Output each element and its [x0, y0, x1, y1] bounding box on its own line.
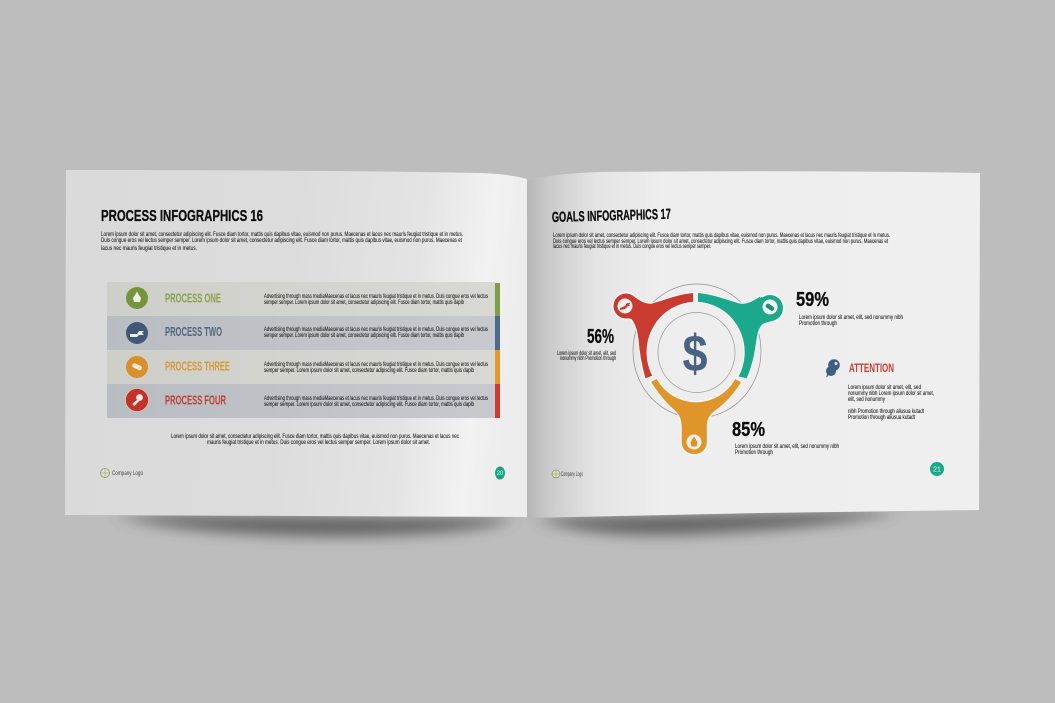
dollar sign: $ [682, 325, 708, 383]
row: process three: semper semper. Lorem ipsum dolor sit amet, consectetur adipiscing elit. Fusce diam tortor, mattis quis dapib [264, 367, 474, 374]
row: process two: semper semper. Lorem ipsum dolor sit amet, consectetur adipiscing elit. Fusce diam tortor, mattis quis dapib [264, 332, 464, 339]
row: process four: Advertising through mass mediaMaecenas et lacus nec mauris feugiat tristique et in metus. Duis congue eros vel lectus [264, 395, 488, 402]
title: GOALS INFOGRAPHICS 17 [552, 207, 671, 226]
row: process three [107, 350, 500, 384]
attention callout: ATTENTION [849, 361, 894, 375]
attention callout: Promotion through aliusua kutadt [848, 414, 915, 421]
stat 59% [796, 289, 903, 327]
intro paragraph: lacus nec mauris feugiat tristique et in metus. Duis congue eros vel lectus semper semper. [553, 243, 711, 250]
attention callout [848, 361, 934, 421]
row: process four [107, 384, 500, 418]
row: process one: semper semper. Lorem ipsum dolor sit amet, consectetur adipiscing elit. Fusce diam tortor, mattis quis dapib [264, 299, 464, 306]
row: process four: semper semper. Lorem ipsum dolor sit amet, consectetur adipiscing elit. Fusce diam tortor, mattis quis dapib [264, 401, 474, 408]
row: process one: Advertising through mass mediaMaecenas et lacus nec mauris feugiat tristique et in metus. Duis congue eros vel lectus [264, 293, 488, 300]
page number 20 [495, 466, 505, 480]
page shadows [115, 511, 900, 536]
stat 59%: 59% [796, 289, 829, 311]
stat 56%: nonummy nibh Promotion through [560, 355, 616, 362]
company logo [552, 470, 583, 478]
page number 21 [930, 462, 944, 476]
page number 20: 20 [497, 471, 504, 477]
stat 56% [557, 326, 616, 362]
company logo [100, 468, 143, 478]
teal segment [697, 292, 784, 379]
stat 85% [732, 419, 839, 456]
stat 85%: Promotion through [735, 449, 773, 456]
title: PROCESS INFOGRAPHICS 16 [101, 208, 263, 225]
right page [527, 171, 980, 518]
intro paragraph: Duis congue eros vel lectus semper semper. Lorem ipsum dolor sit amet, consectetur adipiscing elit. Fusce diam tortor, mattis quis dapibus vitae, euismod non purus. Maecenas et [553, 238, 888, 245]
page number 21: 21 [933, 466, 941, 474]
attention callout: nonummy nibh Lorem ipsum dolor sit amet, [848, 390, 934, 397]
intro paragraph [553, 232, 890, 250]
row: process four: PROCESS FOUR [165, 392, 226, 408]
company logo: Company Logo [112, 470, 143, 477]
footer paragraph [171, 433, 459, 446]
row: process two: Advertising through mass mediaMaecenas et lacus nec mauris feugiat tristique et in metus. Duis congue eros vel lectus [264, 326, 488, 333]
intro paragraph: Duis congue eros vel lectus semper semper. Lorem ipsum dolor sit amet, consectetur adipiscing elit. Fusce diam tortor, mattis quis dapibus vitae, euismod non purus. Maecenas et [101, 237, 462, 244]
footer paragraph: Lorem ipsum dolor sit amet, consectetur adipiscing elit. Fusce diam tortor, mattis quis dapibus vitae, euismod non purus. Maecenas et lacus nec [171, 433, 459, 440]
stat 56%: 56% [587, 326, 614, 348]
orange segment [650, 378, 742, 455]
row: process one: PROCESS ONE [165, 290, 221, 306]
stat 85%: 85% [732, 419, 765, 441]
attention callout: elit, sed nonummy [848, 396, 886, 403]
stat 56%: Lorem ipsum dolor sit amet, elit, sed [557, 350, 616, 357]
page sheet [65, 170, 527, 517]
intro paragraph: lacus nec mauris feugiat tristique et in metus. [101, 245, 197, 252]
page sheet [527, 171, 980, 518]
outer thin circle [633, 284, 761, 418]
stat 59%: Promotion through [799, 320, 837, 327]
row: process two [107, 316, 500, 350]
row: process three: Advertising through mass mediaMaecenas et lacus nec mauris feugiat tristique et in metus. Duis congue eros vel lectus [264, 361, 488, 368]
row: process two: PROCESS TWO [165, 324, 222, 339]
stat 59%: Lorem ipsum dolor sit amet, elit, sed nonummy nibh [799, 314, 903, 321]
inner thin circle [658, 312, 735, 392]
attention callout: Lorem ipsum dolor sit amet, elit, sed [848, 384, 921, 391]
stat 85%: Lorem ipsum dolor sit amet, elit, sed nonummy nibh [735, 443, 839, 450]
footer paragraph: mauris feugiat tristique et in metus. Duis congue eros vel lectus semper semper. Lorem ipsum dolor sit amet. [207, 439, 430, 446]
intro paragraph: Lorem ipsum dolor sit amet, consectetur adipiscing elit. Fusce diam tortor, mattis quis dapibus vitae, euismod non purus. Maecenas et lacus nec mauris feugiat tristique et in metus. [553, 232, 890, 239]
goals ring diagram [613, 284, 784, 455]
intro paragraph: Lorem ipsum dolor sit amet, consectetur adipiscing elit. Fusce diam tortor, mattis quis dapibus vitae, euismod non purus. Maecenas et lacus nec mauris feugiat tristique et in metus. [101, 231, 463, 238]
row: process three: PROCESS THREE [165, 358, 230, 374]
row: process one [107, 282, 500, 316]
company logo: Company Logo [561, 472, 583, 478]
red segment [613, 292, 694, 379]
attention callout: nibh Promotion through aliusua kutadt [848, 408, 924, 415]
intro paragraph [101, 231, 463, 252]
icon: push pin [826, 359, 840, 378]
left page [65, 170, 527, 517]
process table [107, 282, 500, 418]
